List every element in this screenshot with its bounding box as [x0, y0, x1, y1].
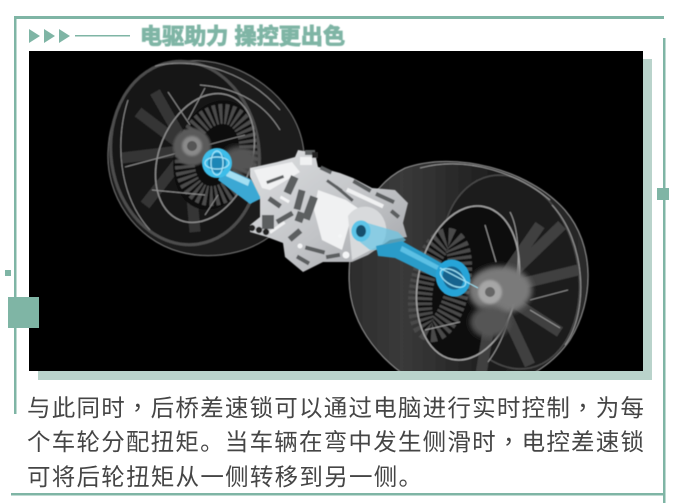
body text: 与此同时，后桥差速锁可以通过电脑进行实时控制，为每 — [27, 389, 644, 423]
body text — [27, 389, 644, 490]
decorative squares — [5, 188, 669, 328]
image shadow panel — [38, 59, 652, 380]
right wheel — [349, 161, 597, 385]
gearbox housing — [249, 150, 408, 272]
photo: transparent drivetrain on black — [29, 51, 643, 385]
left axle in blue — [202, 148, 262, 204]
body text: 可将后轮扭矩从一侧转移到另一侧。 — [27, 464, 422, 490]
body text: 个车轮分配扭矩。当车辆在弯中发生侧滑时，电控差速锁 — [27, 423, 644, 457]
heading: arrows and rule — [29, 29, 130, 43]
right axle in blue — [352, 220, 478, 302]
left wheel — [99, 52, 305, 256]
heading text: 电驱助力 操控更出色 — [140, 24, 345, 49]
